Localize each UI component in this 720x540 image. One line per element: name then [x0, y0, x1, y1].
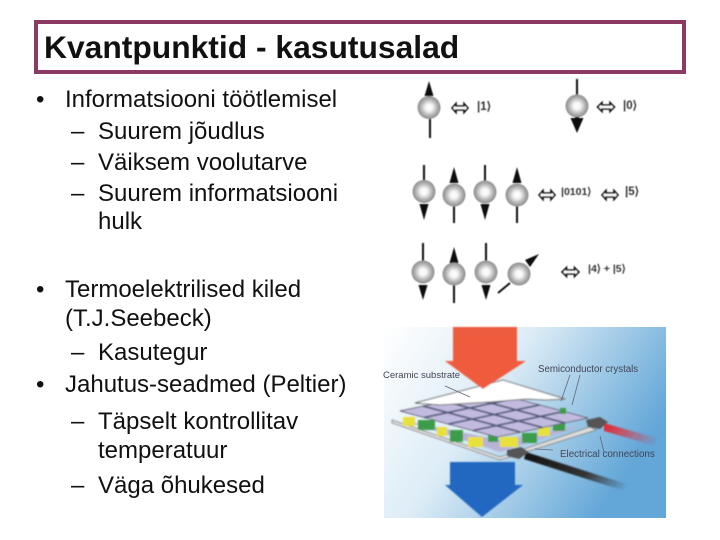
bullet list: •: [36, 86, 44, 113]
spin row: |4> + |5>: [412, 243, 626, 303]
top plate with grid: [400, 392, 588, 437]
spin row: |4> + |5>: |4⟩ + |5⟩: [588, 263, 626, 275]
bullet list: –: [71, 118, 84, 145]
label: electrical connections: Electrical connections: [560, 449, 655, 460]
bullet list: Termoelektrilised kiled: [65, 276, 301, 303]
title: Kvantpunktid - kasutusalad: [44, 29, 459, 65]
bullet list: •: [36, 276, 44, 303]
bullet list: –: [71, 180, 84, 207]
hot heat arrow: [445, 327, 526, 389]
bullet list: •: [36, 371, 44, 398]
spin row: |0101> = |5>: |5⟩: [625, 185, 639, 198]
bullet list: [36, 86, 346, 499]
bullet list: Väga õhukesed: [98, 472, 265, 499]
peltier cooler illustration: [383, 327, 666, 518]
bullet list: (T.J.Seebeck): [65, 305, 212, 332]
bullet list: Informatsiooni töötlemisel: [65, 86, 337, 113]
connectors: [507, 417, 608, 459]
bullet list: Suurem jõudlus: [98, 118, 265, 145]
bullet list: –: [71, 339, 84, 366]
spin state: |1>: |1⟩: [477, 100, 491, 113]
spin state: |0>: [566, 79, 637, 133]
bullet list: Väiksem voolutarve: [98, 149, 307, 176]
label: ceramic substrate: Ceramic substrate: [383, 370, 460, 381]
bullet list: temperatuur: [98, 437, 227, 464]
black wire: [524, 452, 645, 496]
spin state: |0>: |0⟩: [623, 99, 637, 112]
leader lines: [445, 375, 604, 452]
title box: [34, 20, 686, 74]
spin row: |0101> = |5>: [412, 165, 639, 223]
bullet list: –: [71, 149, 84, 176]
ceramic substrate: [415, 380, 565, 405]
bullet list: –: [71, 408, 84, 435]
bullet list: Kasutegur: [98, 339, 207, 366]
spin state: |1>: [418, 81, 491, 138]
bullet list: hulk: [98, 208, 142, 235]
label: semiconductor crystals: Semiconductor crystals: [538, 364, 638, 375]
bullet list: Suurem informatsiooni: [98, 180, 338, 207]
lower lavender layer: [402, 420, 585, 452]
red wire: [604, 423, 666, 449]
bullet list: Täpselt kontrollitav: [98, 408, 298, 435]
semiconductor crystals: [403, 417, 550, 447]
cold heat arrow: [445, 462, 523, 517]
spin row: |0101> = |5>: |0101⟩: [561, 186, 591, 198]
bullet list: Jahutus-seadmed (Peltier): [65, 371, 346, 398]
lower plate: [392, 420, 596, 460]
bullet list: –: [71, 472, 84, 499]
